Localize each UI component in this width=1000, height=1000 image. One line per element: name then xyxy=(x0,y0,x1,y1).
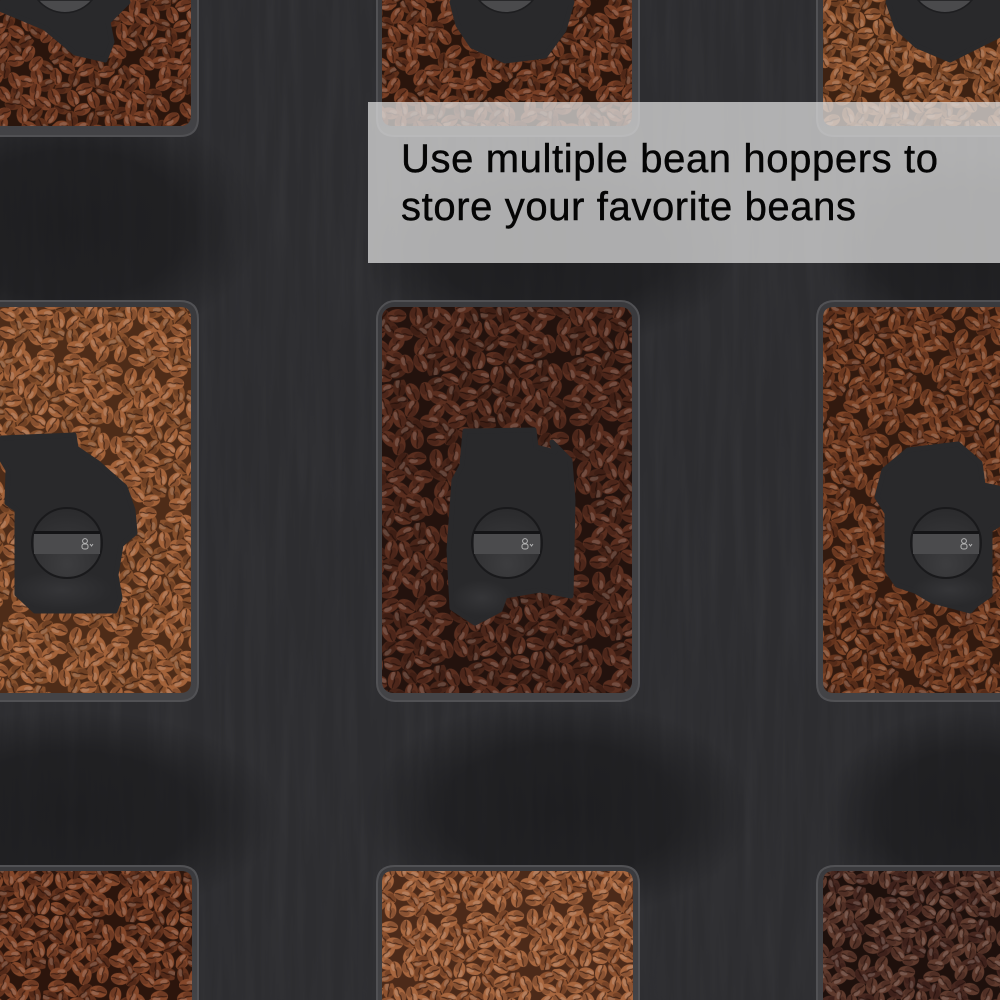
hopper: bottom row centre xyxy=(377,866,639,1000)
caption panel xyxy=(368,102,1000,263)
knob: left hopper xyxy=(32,508,102,578)
caption text xyxy=(401,137,938,229)
bean well: left hopper xyxy=(2,435,135,611)
caption text: Use multiple bean hoppers to xyxy=(401,137,938,181)
bean well: centre hopper xyxy=(449,430,573,623)
well reflection: right hopper xyxy=(912,574,988,606)
hopper: top row centre xyxy=(377,0,639,136)
hopper: middle row right, medium roast xyxy=(817,301,1000,701)
bean well: right hopper xyxy=(877,444,998,611)
hopper: top row left xyxy=(0,0,198,136)
hopper: bottom row left xyxy=(0,866,198,1000)
well reflection: left hopper xyxy=(12,570,112,610)
well reflection: centre hopper xyxy=(452,580,512,616)
knob: right hopper xyxy=(911,508,981,578)
icon: bean quantity xyxy=(522,539,533,549)
knob: centre hopper xyxy=(472,508,542,578)
hopper: top row right xyxy=(817,0,1000,136)
icon: bean quantity xyxy=(82,539,93,549)
hopper: bottom row right xyxy=(817,866,1000,1000)
hopper: middle row centre, dark roast xyxy=(377,301,639,701)
hopper: middle row left, light roast xyxy=(0,301,198,701)
icon: bean quantity xyxy=(961,539,972,549)
caption text: store your favorite beans xyxy=(401,185,856,229)
